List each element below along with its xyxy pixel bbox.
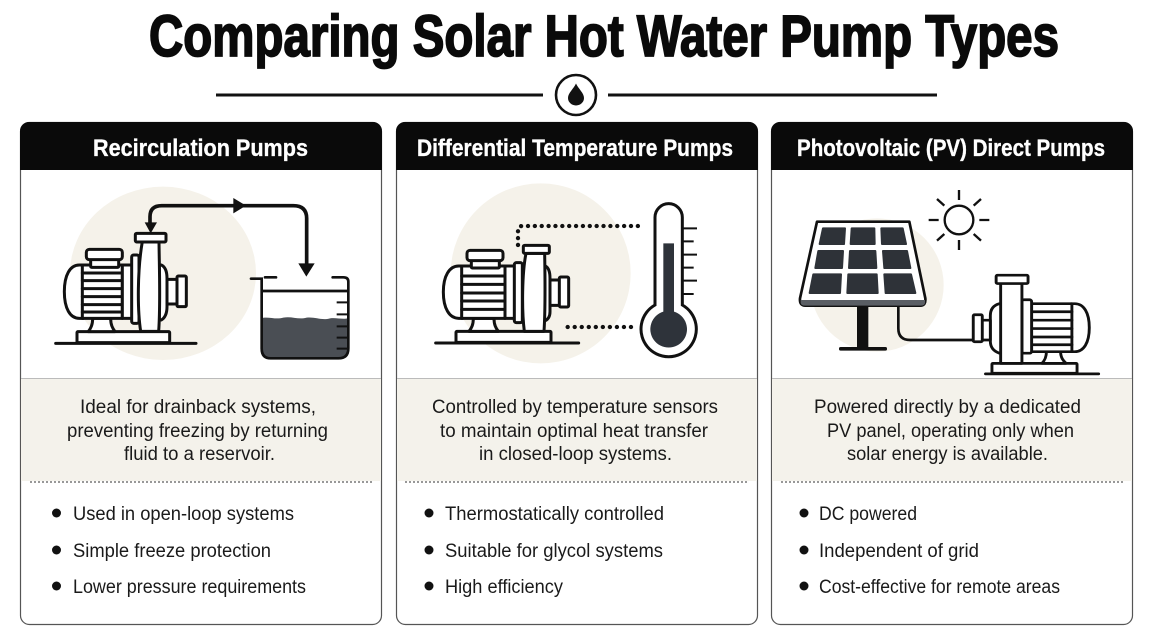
icon: reservoir tank xyxy=(251,277,348,358)
panel: recirculation pumps xyxy=(20,122,382,624)
description band: Ideal for drainback systems, xyxy=(80,397,316,418)
description band xyxy=(772,378,1132,481)
dotted sensor line: lower xyxy=(568,320,631,334)
bullet list: DC powered xyxy=(819,504,917,525)
icon: thermometer xyxy=(641,204,697,357)
illustration: solar panel powering pump xyxy=(798,190,1100,376)
bullet list: Cost-effective for remote areas xyxy=(819,577,1060,598)
description band: solar energy is available. xyxy=(847,444,1048,465)
description band: preventing freezing by returning xyxy=(67,421,328,442)
description band xyxy=(397,378,757,481)
icon: centrifugal pump xyxy=(436,245,579,343)
bullet list: High efficiency xyxy=(445,577,563,598)
description band: in closed-loop systems. xyxy=(479,444,672,465)
bullet list: Independent of grid xyxy=(819,541,979,562)
panel header: recirculation: Recirculation Pumps xyxy=(93,135,308,162)
illustration: pump with thermostat xyxy=(434,184,698,364)
icon: centrifugal pump xyxy=(56,233,196,343)
wire: panel to pump xyxy=(898,306,974,340)
bullet list xyxy=(424,504,664,598)
title divider with water drop icon xyxy=(216,75,937,115)
icon: solar panel xyxy=(800,222,925,351)
panel header: recirculation xyxy=(20,122,382,170)
icon: sun xyxy=(929,190,989,250)
description band: to maintain optimal heat transfer xyxy=(440,421,709,442)
bullet list xyxy=(52,504,306,598)
description band: PV panel, operating only when xyxy=(827,421,1074,442)
bullet list: Lower pressure requirements xyxy=(73,577,306,598)
description band: Controlled by temperature sensors xyxy=(432,397,718,418)
description band: fluid to a reservoir. xyxy=(124,444,275,465)
bullet list: Suitable for glycol systems xyxy=(445,541,663,562)
bullet list: Used in open-loop systems xyxy=(73,504,294,525)
panel header: photovoltaic xyxy=(771,122,1133,170)
description band: Powered directly by a dedicated xyxy=(814,397,1081,418)
bullet list: Simple freeze protection xyxy=(73,541,271,562)
bullet list xyxy=(800,504,1060,598)
panel: differential temperature pumps xyxy=(396,122,758,624)
arrow: flow loop xyxy=(145,198,315,277)
panel header: differential xyxy=(396,122,758,170)
icon: centrifugal pump xyxy=(973,275,1099,374)
description band xyxy=(21,378,381,481)
bullet list: Thermostatically controlled xyxy=(445,504,664,525)
panel: photovoltaic direct pumps xyxy=(771,122,1133,624)
panel header: photovoltaic: Photovoltaic (PV) Direct Pumps xyxy=(797,135,1105,162)
illustration: pump to reservoir loop xyxy=(54,186,350,360)
panel header: differential: Differential Temperature Pumps xyxy=(417,135,733,162)
dotted sensor line: upper xyxy=(518,226,644,245)
